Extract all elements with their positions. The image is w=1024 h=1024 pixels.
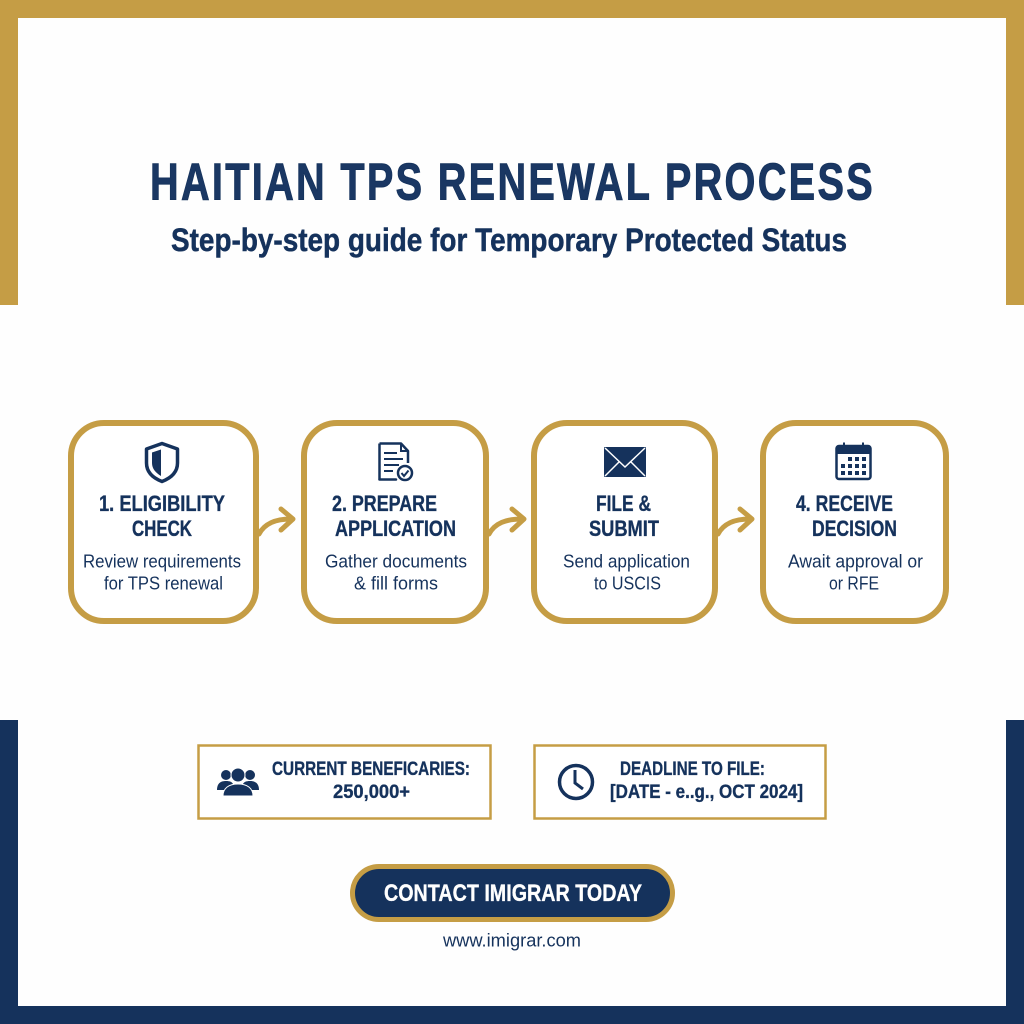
icon: shield [146, 444, 178, 482]
step 3 description [563, 550, 690, 594]
step 1 heading [99, 491, 225, 541]
arrow: step 3 to 4 [718, 509, 752, 534]
step 4 description: Await approval or [788, 550, 923, 572]
beneficiaries text [272, 759, 470, 803]
step 4 heading: DECISION [812, 516, 897, 541]
step 1 panel: eligibility check [71, 423, 256, 621]
icon: calendar [836, 442, 870, 479]
step 4 heading: 4. RECEIVE [796, 491, 893, 516]
subtitle: Step-by-step guide for Temporary Protected Status [171, 222, 847, 258]
step 4 heading [796, 491, 897, 541]
step 4 description: or RFE [829, 572, 879, 594]
step 2 description: Gather documents [325, 550, 467, 572]
stat panel: current beneficiaries [198, 746, 490, 818]
icon: people [217, 768, 259, 796]
step 2 heading: 2. PREPARE [332, 491, 437, 516]
step 3 heading [589, 491, 659, 541]
deadline text: [DATE - e..g., OCT 2024] [610, 782, 803, 803]
step 4 panel: receive decision [763, 423, 946, 621]
step 4 description [788, 550, 923, 594]
gold top frame [0, 0, 1024, 305]
call to action button [352, 866, 672, 920]
call to action button: CONTACT IMIGRAR TODAY [384, 880, 642, 907]
step 2 heading [332, 491, 456, 541]
stat panel: deadline to file [534, 746, 826, 818]
step 3 description: Send application [563, 550, 690, 572]
arrow: step 2 to 3 [489, 509, 524, 534]
navy bottom frame [0, 720, 1024, 1024]
icon: envelope [604, 447, 646, 477]
arrow: step 1 to 2 [259, 509, 293, 534]
step 2 panel: prepare application [304, 423, 486, 621]
step 1 description [83, 550, 241, 594]
step 2 heading: APPLICATION [335, 516, 456, 541]
beneficiaries text: CURRENT BENEFICARIES: [272, 759, 470, 780]
step 3 description: to USCIS [594, 572, 661, 594]
website: www.imigrar.com [442, 930, 581, 950]
deadline text: DEADLINE TO FILE: [620, 759, 765, 780]
step 3 panel: file and submit [534, 423, 715, 621]
step 1 heading: CHECK [132, 516, 193, 541]
icon: clock [560, 766, 592, 798]
step 3 heading: FILE & [596, 491, 651, 516]
icon: document with check [380, 444, 412, 480]
step 1 description: for TPS renewal [104, 572, 223, 594]
step 2 description: & fill forms [354, 572, 438, 594]
beneficiaries text: 250,000+ [333, 782, 410, 803]
deadline text [610, 759, 803, 803]
step 1 heading: 1. ELIGIBILITY [99, 491, 225, 516]
step 3 heading: SUBMIT [589, 516, 659, 541]
step 2 description [325, 550, 467, 594]
step 1 description: Review requirements [83, 550, 241, 572]
